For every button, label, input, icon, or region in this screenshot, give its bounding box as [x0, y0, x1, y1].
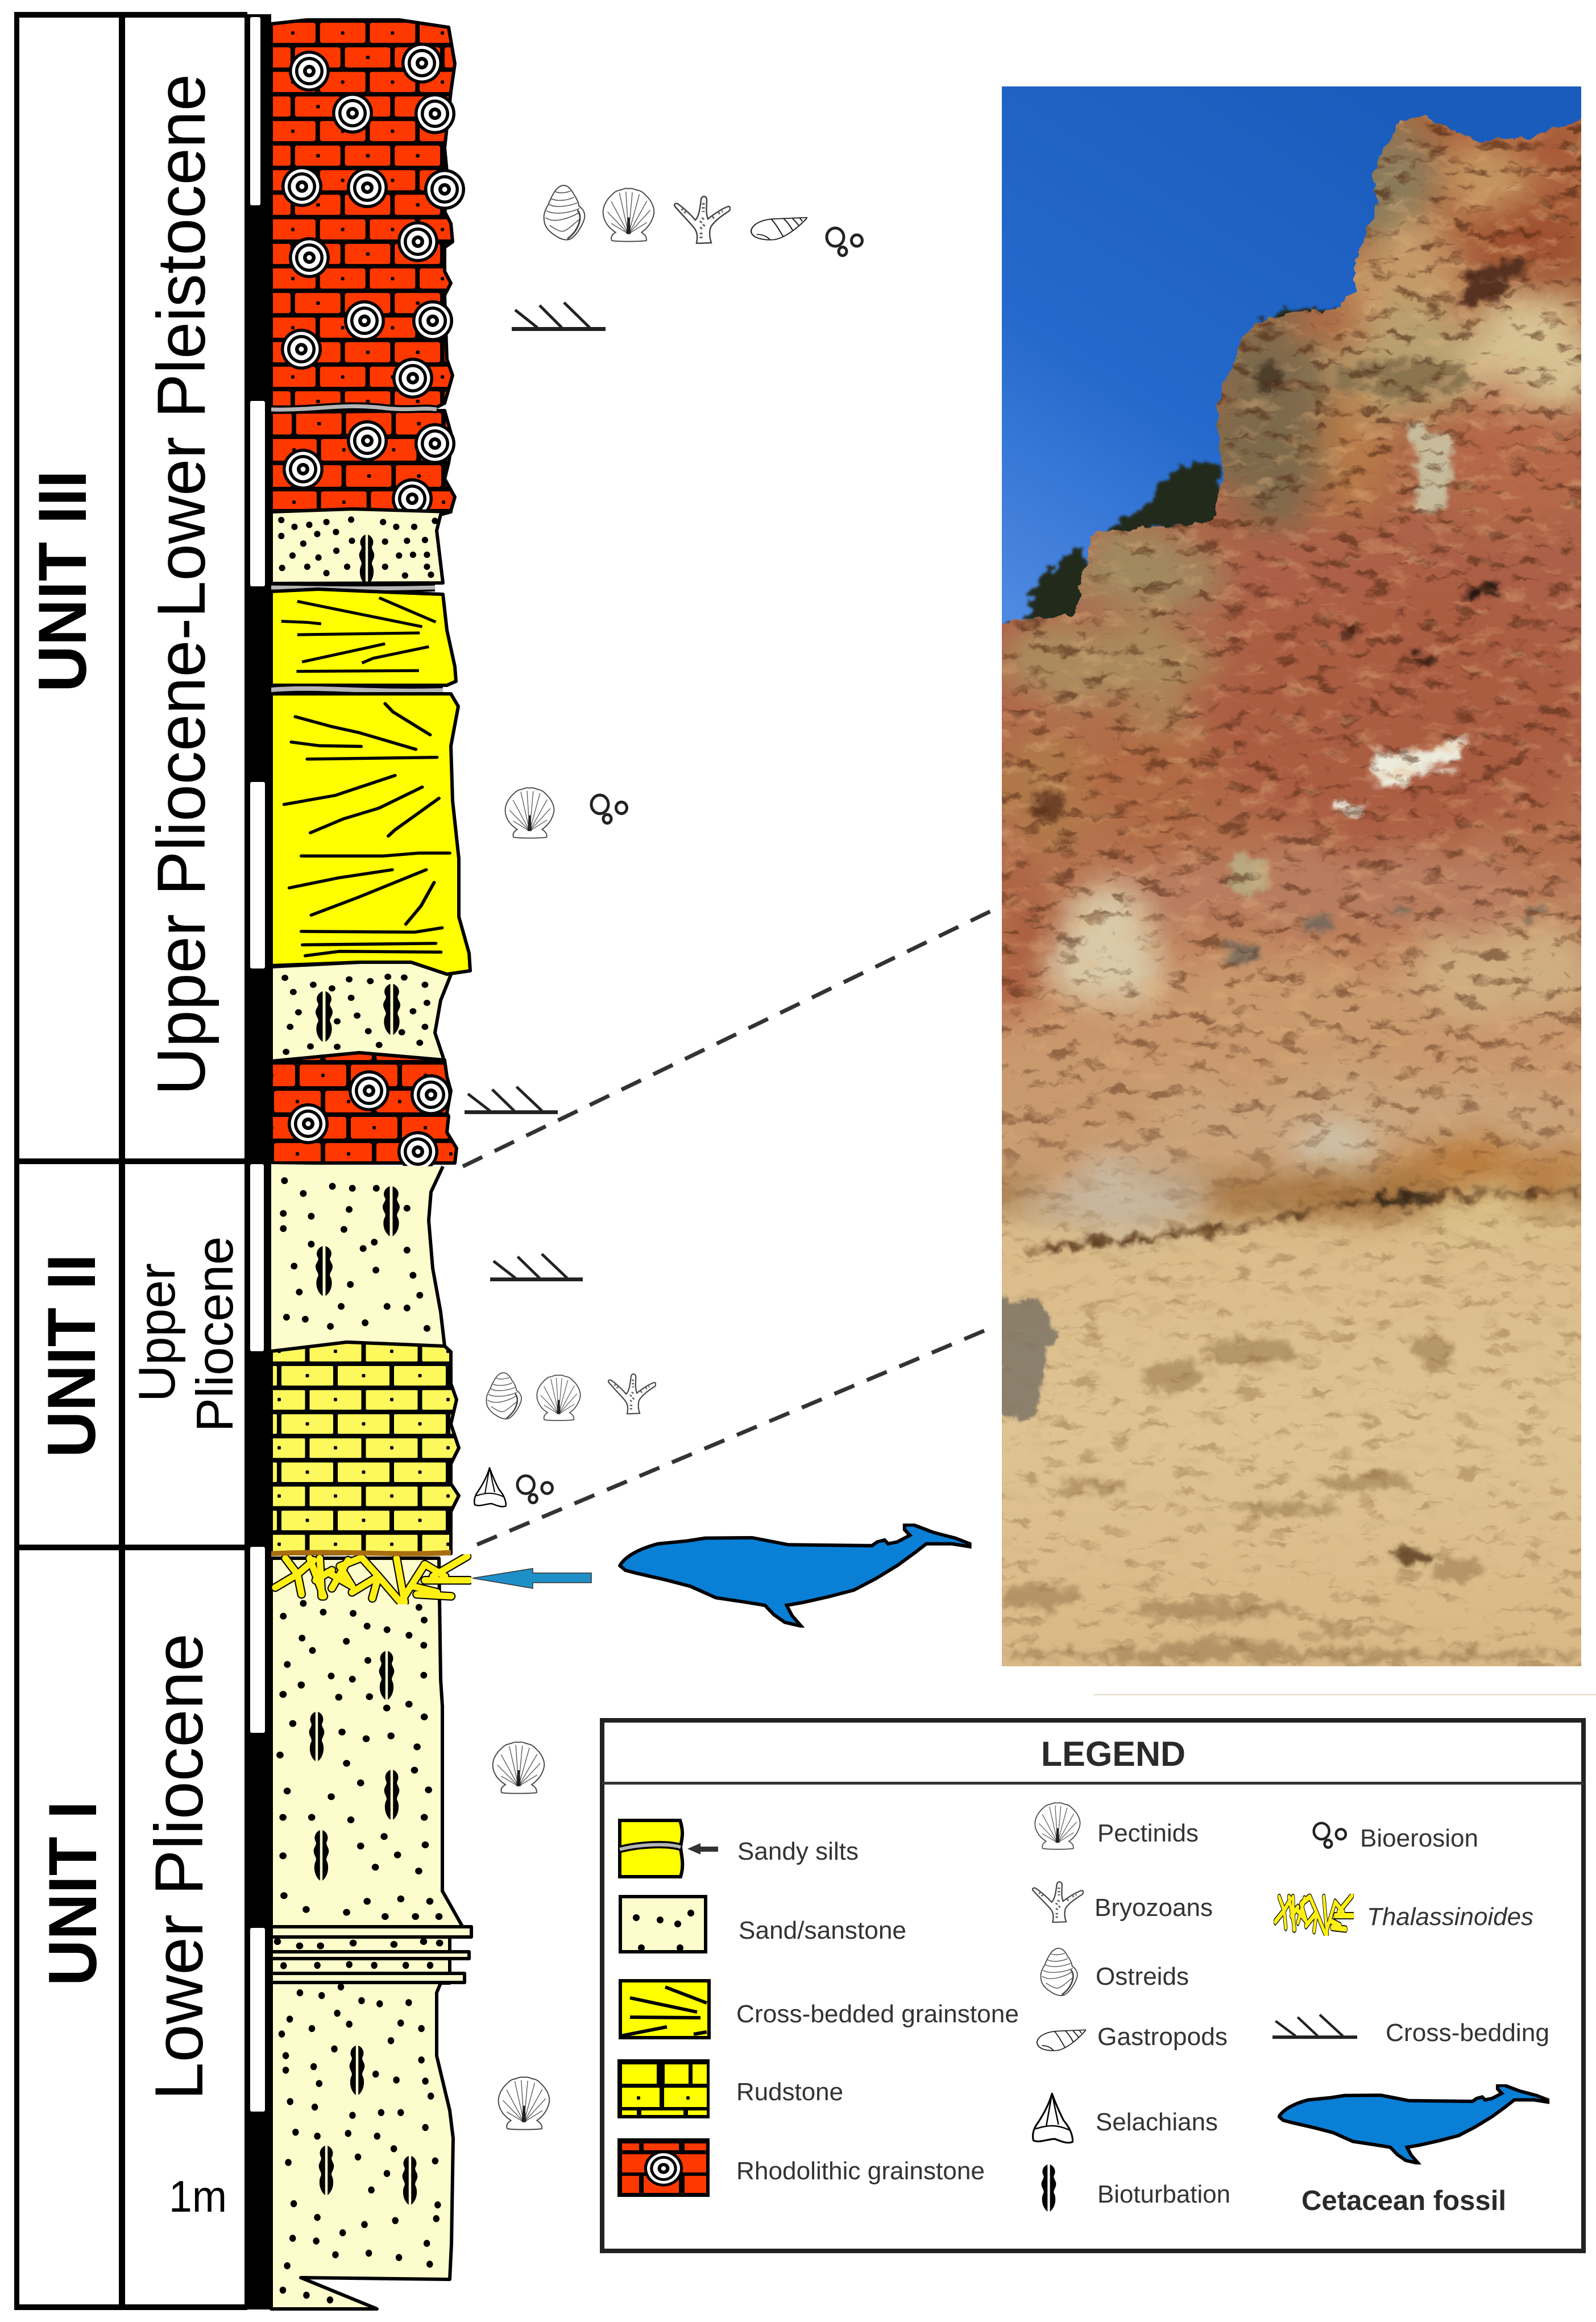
swatch: sand — [620, 1897, 706, 1952]
age label: Upper Pliocene — [128, 1236, 244, 1432]
label: cross-bedded: Cross-bedded grainstone — [736, 2000, 1019, 2028]
layer: cross-bedded grainstone upper — [271, 589, 456, 685]
fossil icon: bioerosion unit II — [517, 1476, 553, 1503]
label: pectinids: Pectinids — [1097, 1819, 1199, 1847]
arrow pointing to fossil level — [472, 1568, 591, 1588]
age label: Upper Pliocene-Lower Pleistocene: Upper Pliocene-Lower Pleistocene — [143, 74, 219, 1095]
age label: Lower Pliocene: Lower Pliocene — [141, 1633, 217, 2100]
layer: Thalassinoides burrows — [271, 1553, 469, 1602]
fossil icon: gastropod top — [751, 217, 807, 240]
label: ostreids: Ostreids — [1096, 1963, 1189, 1990]
layer: cross-bedded grainstone lower — [271, 694, 470, 974]
layer: rhodolithic grainstone second — [271, 406, 455, 519]
legend icon: bryozoan — [1033, 1882, 1083, 1922]
panel: outcrop photograph — [989, 86, 1596, 1679]
label: rhodolithic grainstone: Rhodolithic grainstone — [736, 2157, 985, 2185]
legend title: LEGEND — [1041, 1735, 1185, 1773]
heading: UNIT II: UNIT II — [34, 1254, 110, 1458]
legend icon: ostreid — [1040, 1948, 1077, 1996]
heading: UNIT I: UNIT I — [35, 1801, 111, 1986]
fossil icon: bioerosion top — [827, 228, 862, 256]
legend icon: pectinid — [1035, 1803, 1080, 1849]
dashed correlation line upper — [463, 910, 993, 1166]
fossil icon: pectinid middle — [505, 788, 554, 838]
swatch: rudstone — [617, 2059, 710, 2118]
decorative strip under the photo — [1094, 1694, 1596, 1695]
stratigraphic column frame — [14, 12, 247, 2310]
fossil icon: ostreid top — [544, 185, 584, 240]
heading: UNIT III: UNIT III — [24, 470, 101, 692]
legend icon: whale — [1279, 2085, 1548, 2163]
dashed correlation line lower — [477, 1327, 992, 1545]
legend icon: bioerosion — [1314, 1823, 1346, 1848]
fossil icon: pectinid unit II — [537, 1375, 581, 1421]
label: bioturbation: Bioturbation — [1097, 2180, 1230, 2208]
label: bioerosion: Bioerosion — [1360, 1824, 1478, 1852]
fossil icon: bioerosion middle — [591, 795, 627, 823]
swatch: sandy silts — [620, 1820, 718, 1877]
label: thalassinoides: Thalassinoides — [1367, 1903, 1533, 1931]
age label: Upper Pliocene: Pliocene — [186, 1236, 244, 1432]
fossil icon: pectinid unit I upper — [493, 1742, 544, 1794]
fossil icon: bryozoan unit II — [608, 1374, 656, 1414]
legend icon: selachian — [1033, 2093, 1073, 2143]
parting: grey sandy silt — [271, 689, 443, 691]
layer: sand with bioturbation — [271, 509, 451, 585]
label: cross-bedding: Cross-bedding — [1386, 2019, 1549, 2047]
fossil icon: bryozoan top — [674, 196, 730, 243]
age label: Upper Pliocene: Upper — [128, 1263, 186, 1402]
label: sandy silts: Sandy silts — [737, 1837, 859, 1865]
label: cetacean fossil: Cetacean fossil — [1301, 2186, 1506, 2216]
fossil icon: pectinid unit I lower — [499, 2077, 549, 2130]
legend icon: bioturbation — [1042, 2164, 1056, 2212]
cross-bedding symbol unit III base — [465, 1087, 558, 1114]
layer: rhodolithic grainstone top — [271, 20, 465, 407]
panel: legend — [602, 1720, 1583, 2251]
layer: sand with bioturbation second — [271, 962, 451, 1063]
legend icon: thalassinoides — [1275, 1895, 1353, 1934]
layer: rudstone — [271, 1342, 459, 1554]
fossil icon: pectinid top — [603, 188, 654, 242]
label: selachians: Selachians — [1096, 2108, 1218, 2136]
label: rudstone: Rudstone — [736, 2078, 843, 2106]
layer: sand lower with beds — [271, 1558, 471, 2309]
parting: grey sandy silt — [271, 587, 435, 589]
layer: sand with bioturbation third — [271, 1164, 445, 1351]
swatch: rhodolithic grainstone — [617, 2138, 710, 2197]
stratigraphic column — [271, 20, 471, 2309]
label: gastropods: Gastropods — [1097, 2023, 1228, 2051]
label: sand: Sand/sanstone — [739, 1917, 906, 1944]
label: bryozoans: Bryozoans — [1095, 1894, 1213, 1922]
scale bar — [244, 14, 271, 2309]
swatch: cross-bedded — [620, 1981, 709, 2038]
whale silhouette — [620, 1525, 970, 1626]
cross-bedding symbol top — [512, 303, 606, 331]
fossil icon: selachian tooth — [474, 1468, 506, 1506]
cross-bedding symbol unit II — [490, 1254, 583, 1281]
scale label: 1m: 1m — [169, 2171, 227, 2221]
layer: rhodolithic grainstone third — [271, 1053, 457, 1172]
legend icon: cross-bedding — [1272, 2015, 1357, 2039]
fossil icon: ostreid unit II — [486, 1373, 521, 1419]
legend icon: gastropod — [1037, 2030, 1086, 2051]
